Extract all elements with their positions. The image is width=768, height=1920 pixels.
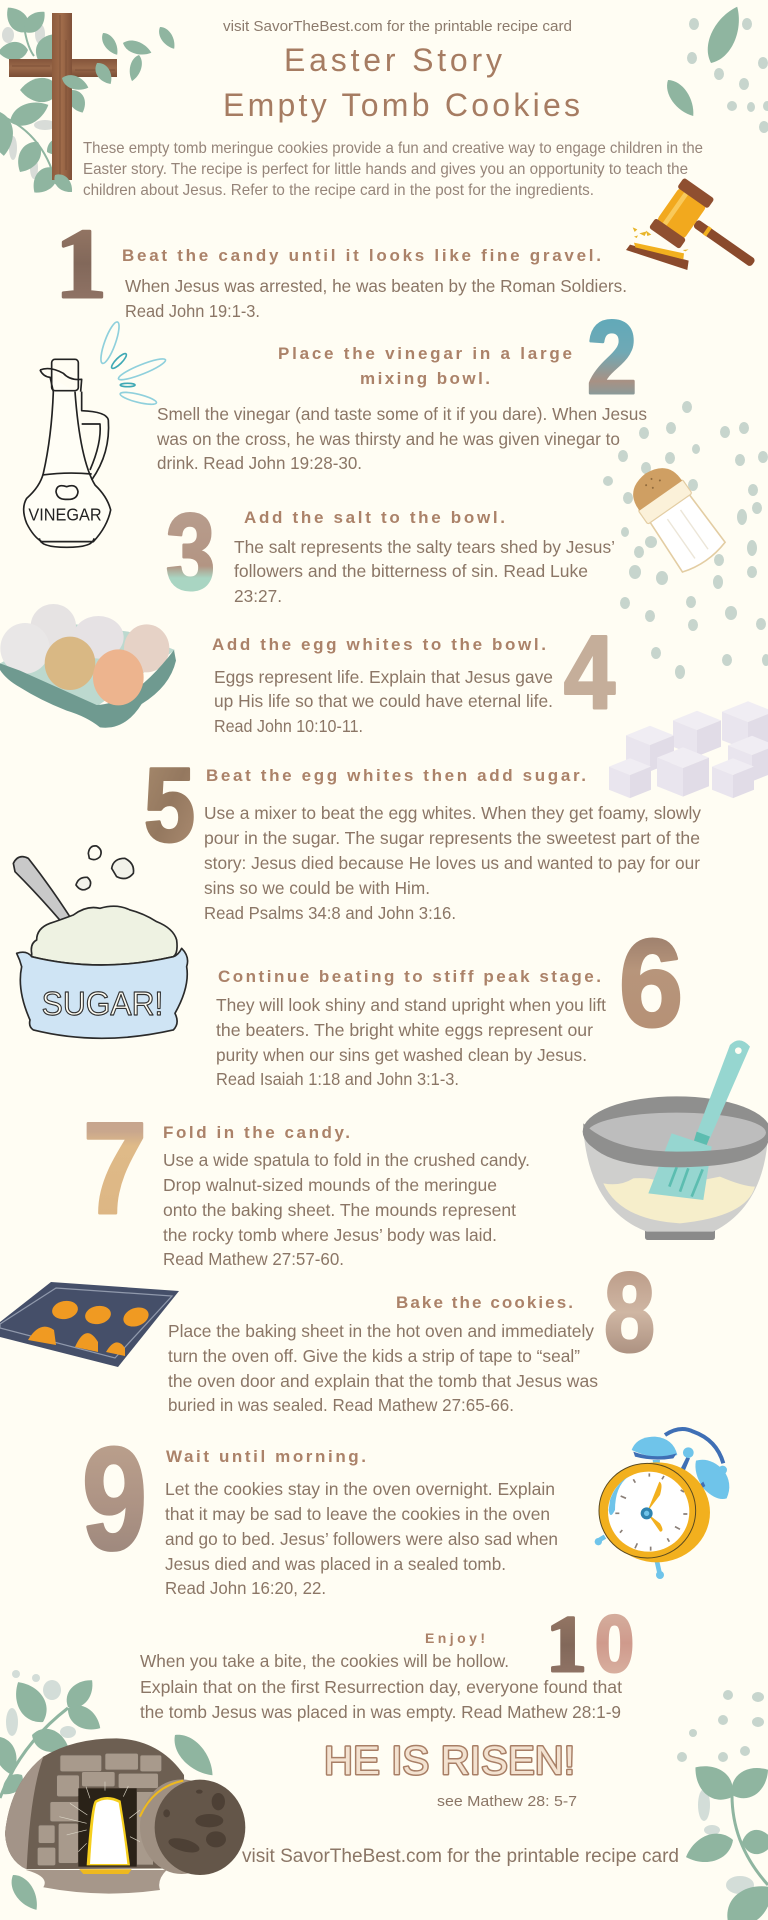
icon: empty tomb: [5, 1738, 245, 1894]
body: Eggs represent life. Explain that Jesus gave: [214, 667, 553, 687]
body: that it may be sad to leave the cookies in the oven: [165, 1504, 550, 1524]
body: Read Psalms 34:8 and John 3:16.: [204, 903, 456, 923]
body: When Jesus was arrested, he was beaten by the Roman Soldiers.: [125, 276, 627, 296]
number 10: 1: [546, 1601, 587, 1689]
body: the tomb Jesus was placed in was empty. Read Mathew 28:1-9: [140, 1702, 621, 1722]
heading: Fold in the candy.: [163, 1123, 350, 1142]
body: 23:27.: [234, 586, 282, 606]
title: Empty Tomb Cookies: [223, 87, 580, 123]
step 6: [216, 915, 683, 1089]
body: [125, 276, 627, 321]
icon: alarm clock: [595, 1429, 729, 1579]
body: sins so we could be with Him.: [204, 878, 430, 898]
number 2: 2: [587, 300, 637, 416]
body: buried in was sealed. Read Mathew 27:65-66.: [168, 1395, 514, 1415]
intro text: children about Jesus. Refer to the recipe card in the post for the ingredients.: [83, 182, 594, 199]
sugar label: SUGAR!: [42, 986, 163, 1023]
body: Use a mixer to beat the egg whites. When they get foamy, slowly: [204, 803, 701, 823]
step 4: [212, 615, 615, 736]
step 8: [168, 1250, 655, 1415]
number 8: 8: [604, 1250, 655, 1375]
step 1: [55, 208, 627, 321]
heading: Place the vinegar in a large: [278, 344, 572, 363]
body: up His life so that we could have eternal life.: [214, 691, 553, 711]
number 6: 6: [619, 915, 683, 1053]
icon: sugar bowl: [13, 846, 188, 1038]
cross with vine leaves: [0, 2, 179, 199]
title: [223, 42, 580, 123]
step 2: [156, 300, 647, 473]
body: was on the cross, he was thirsty and he was given vinegar to: [156, 429, 620, 449]
title: Easter Story: [284, 42, 502, 78]
intro text: [83, 140, 703, 199]
icon: gavel: [626, 178, 768, 289]
intro text: Easter story. The recipe is perfect for little hands and gives you an opportunity to teach the: [83, 161, 688, 178]
icon: egg carton: [0, 604, 176, 728]
icon: baking tray: [0, 1282, 179, 1367]
body: [216, 995, 606, 1089]
step 9: [82, 1417, 558, 1598]
body: Read Mathew 27:57-60.: [163, 1249, 344, 1269]
heading: Enjoy!: [425, 1630, 485, 1646]
body: the beaters. The bright white eggs represent our: [216, 1020, 593, 1040]
heading: Add the salt to the bowl.: [244, 508, 505, 527]
heading: Bake the cookies.: [396, 1293, 573, 1312]
body: [165, 1479, 558, 1598]
decorative dots: bottom right: [677, 1690, 764, 1762]
body: onto the baking sheet. The mounds represent: [163, 1200, 516, 1220]
body: Use a wide spatula to fold in the crushed candy.: [163, 1150, 530, 1170]
body: Smell the vinegar (and taste some of it if you dare). When Jesus: [157, 404, 647, 424]
vinegar label: VINEGAR: [28, 505, 102, 525]
heading: [278, 344, 572, 388]
icon: mixing bowl: [583, 1040, 768, 1240]
body: followers and the bitterness of sin. Read Luke: [234, 561, 588, 581]
body: drink. Read John 19:28-30.: [157, 453, 362, 473]
step 3: [166, 491, 615, 612]
body: Drop walnut-sized mounds of the meringue: [163, 1175, 497, 1195]
body: Read John 19:1-3.: [125, 301, 260, 321]
icon: salt shaker: [623, 458, 728, 576]
leaves and vine: bottom right: [682, 1756, 768, 1920]
number 1: 1: [55, 208, 107, 319]
heading: mixing bowl.: [360, 369, 490, 388]
body: [156, 404, 647, 473]
body: [163, 1150, 530, 1269]
step 7: [83, 1095, 530, 1269]
decorative dots: top right: [687, 18, 768, 133]
number 5: 5: [144, 747, 195, 864]
body: Explain that on the first Resurrection day, everyone found that: [140, 1677, 622, 1697]
number 3: 3: [166, 491, 215, 612]
body: purity when our sins get washed clean by Jesus.: [216, 1045, 587, 1065]
body: The salt represents the salty tears shed by Jesus’: [234, 537, 615, 557]
body: the oven door and explain that the tomb that Jesus was: [168, 1371, 598, 1391]
icon: sugar cubes: [609, 701, 768, 798]
heading: Wait until morning.: [166, 1447, 366, 1466]
body: [214, 667, 553, 736]
body: pour in the sugar. The sugar represents the sweetest part of the: [204, 828, 700, 848]
body: [140, 1651, 622, 1722]
body: [204, 803, 701, 923]
body: Read John 10:10-11.: [214, 716, 363, 736]
leaves: top right: [661, 2, 748, 121]
top link: visit SavorTheBest.com for the printable recipe card: [223, 18, 572, 35]
heading: Beat the candy until it looks like fine gravel.: [122, 246, 601, 265]
body: Read Isaiah 1:18 and John 3:1-3.: [216, 1069, 459, 1089]
body: Let the cookies stay in the oven overnight. Explain: [165, 1479, 555, 1499]
leaves and vine: bottom left: [0, 1670, 221, 1915]
bottom link: visit SavorTheBest.com for the printable recipe card: [242, 1846, 679, 1867]
step 5: [144, 747, 701, 923]
body: and go to bed. Jesus’ followers were also sad when: [165, 1529, 558, 1549]
body: Place the baking sheet in the hot oven and immediately: [168, 1321, 594, 1341]
number 10: [546, 1599, 634, 1689]
number 9: 9: [82, 1417, 147, 1580]
number 4: 4: [564, 615, 615, 731]
body: They will look shiny and stand upright when you lift: [216, 995, 606, 1015]
body: When you take a bite, the cookies will be hollow.: [140, 1651, 509, 1671]
number 7: 7: [83, 1095, 147, 1241]
heading: Continue beating to stiff peak stage.: [218, 967, 601, 986]
number 10: 0: [595, 1599, 634, 1688]
body: story: Jesus died because He loves us and wanted to pay for our: [204, 853, 700, 873]
icon: vinegar bottle: [24, 320, 167, 547]
heading: Beat the egg whites then add sugar.: [206, 766, 586, 785]
heading: Add the egg whites to the bowl.: [212, 635, 546, 654]
intro text: These empty tomb meringue cookies provide a fun and creative way to engage children in the: [83, 140, 703, 157]
body: turn the oven off. Give the kids a strip of tape to “seal”: [168, 1346, 580, 1366]
body: Read John 16:20, 22.: [165, 1578, 326, 1598]
body: the rocky tomb where Jesus’ body was laid.: [163, 1225, 497, 1245]
body: Jesus died and was placed in a sealed tomb.: [165, 1554, 506, 1574]
step 10: [140, 1599, 634, 1722]
scripture reference: see Mathew 28: 5-7: [437, 1793, 577, 1810]
body: [234, 537, 615, 606]
body: [168, 1321, 598, 1415]
decorative dots: middle right: [603, 401, 768, 679]
he is risen heading: HE IS RISEN!: [324, 1739, 575, 1783]
